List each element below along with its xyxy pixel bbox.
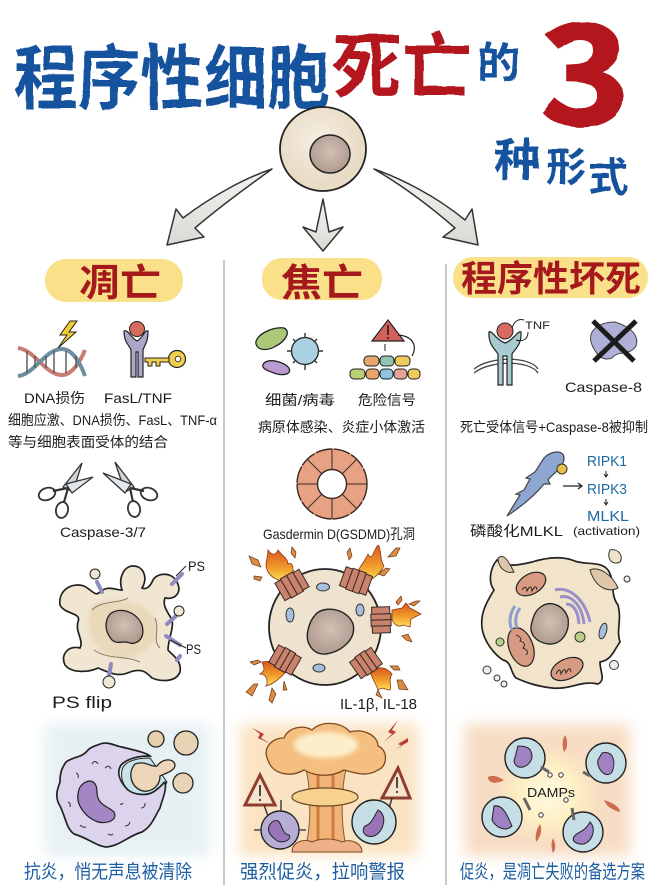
icon: bacteria and virus [256,328,323,375]
illustration: DAMPs release [465,724,630,856]
label: Caspase-8: Caspase-8 [565,379,642,395]
label: DNA damage: DNA损伤 [24,390,85,406]
label: GSDMD pore: Gasdermin D(GSDMD)孔洞 [263,526,415,542]
heading: pyroptosis [262,252,382,307]
icon: pyroptotic cell with pores and flames [246,545,421,703]
label: IL-1beta, IL-18: IL-1β, IL-18 [340,696,417,713]
illustration: macrophage clearing apoptotic bodies [45,724,210,856]
label: danger signal: 危险信号 [358,392,416,408]
icon: phosphorylated MLKL [507,452,582,516]
icon: apoptotic blebbing cell [60,566,186,688]
label: TNF: TNF [525,320,550,332]
membrane pores [268,566,391,679]
flames [260,545,421,690]
icon: necroptotic cell rupturing [482,550,630,688]
label: PS flip: PS flip [52,693,112,712]
title suffix: 式 [588,145,628,203]
label: FasL/TNF: FasL/TNF [104,390,172,406]
icon: damaged DNA with lightning [18,321,85,376]
label: DAMPs: DAMPs [527,785,576,800]
text: pyroptosis trigger: 病原体感染、炎症小体激活 [258,419,425,435]
title red part: 死亡 [332,8,472,113]
title [14,0,630,203]
icon: receptor with key [124,322,186,377]
label: Caspase-3/7: Caspase-3/7 [60,524,146,540]
heading: necroptosis: 程序性坏死 [461,250,641,302]
pathway: RIPK1 RIPK3 MLKL: MLKL [587,508,629,525]
text: apoptosis trigger: 细胞应激、DNA损伤、FasL、TNF-α [8,412,217,428]
label: PS upper: PS [188,558,205,574]
title suffix: 种 [494,124,540,190]
label: phosphorylated MLKL: 磷酸化MLKL [470,523,563,539]
heading: pyroptosis: 焦亡 [281,252,363,307]
icon: central cell [280,107,366,191]
arrow: to necroptosis [374,169,478,245]
pathway: RIPK1 RIPK3 MLKL: RIPK3 [587,481,627,498]
title suffix [494,124,628,203]
title connector: 的 [477,30,521,91]
arrow: to apoptosis [167,169,272,245]
caption: pro-inflammatory alarm: 强烈促炎，拉响警报 [240,861,405,883]
ember fragments [246,547,420,703]
text: apoptosis trigger: 等与细胞表面受体的结合 [8,434,168,450]
heading: apoptosis: 凋亡 [79,252,161,307]
panel: pyroptosis column [240,320,425,883]
heading: apoptosis [45,252,183,307]
caption: anti-inflammatory: 抗炎，悄无声息被清除 [24,861,192,883]
title blue part: 程序性细胞 [14,23,330,124]
icon: blocked caspase-8 [591,321,637,361]
icon: scissors right [103,462,159,518]
icon: scissors left [37,463,93,519]
title suffix: 形 [546,135,586,193]
mitochondria [503,567,587,685]
label: PS lower: PS [186,641,201,657]
label: activation: (activation) [573,524,640,538]
text: apoptosis trigger [8,412,217,450]
icon: danger signal and inflammasome [350,320,420,379]
panel: apoptosis column [8,321,217,883]
pathway: RIPK1 RIPK3 MLKL: RIPK1 [587,453,627,470]
panel: necroptosis column [460,319,648,883]
pathway: RIPK1 RIPK3 MLKL [587,453,629,525]
icon: gasdermin pore ring [297,449,367,519]
icon: TNF receptor [474,319,538,385]
illustration: mushroom cloud alarm [240,720,418,856]
arrow: to pyroptosis [303,199,343,251]
label: bacteria/virus: 细菌/病毒 [265,392,335,408]
